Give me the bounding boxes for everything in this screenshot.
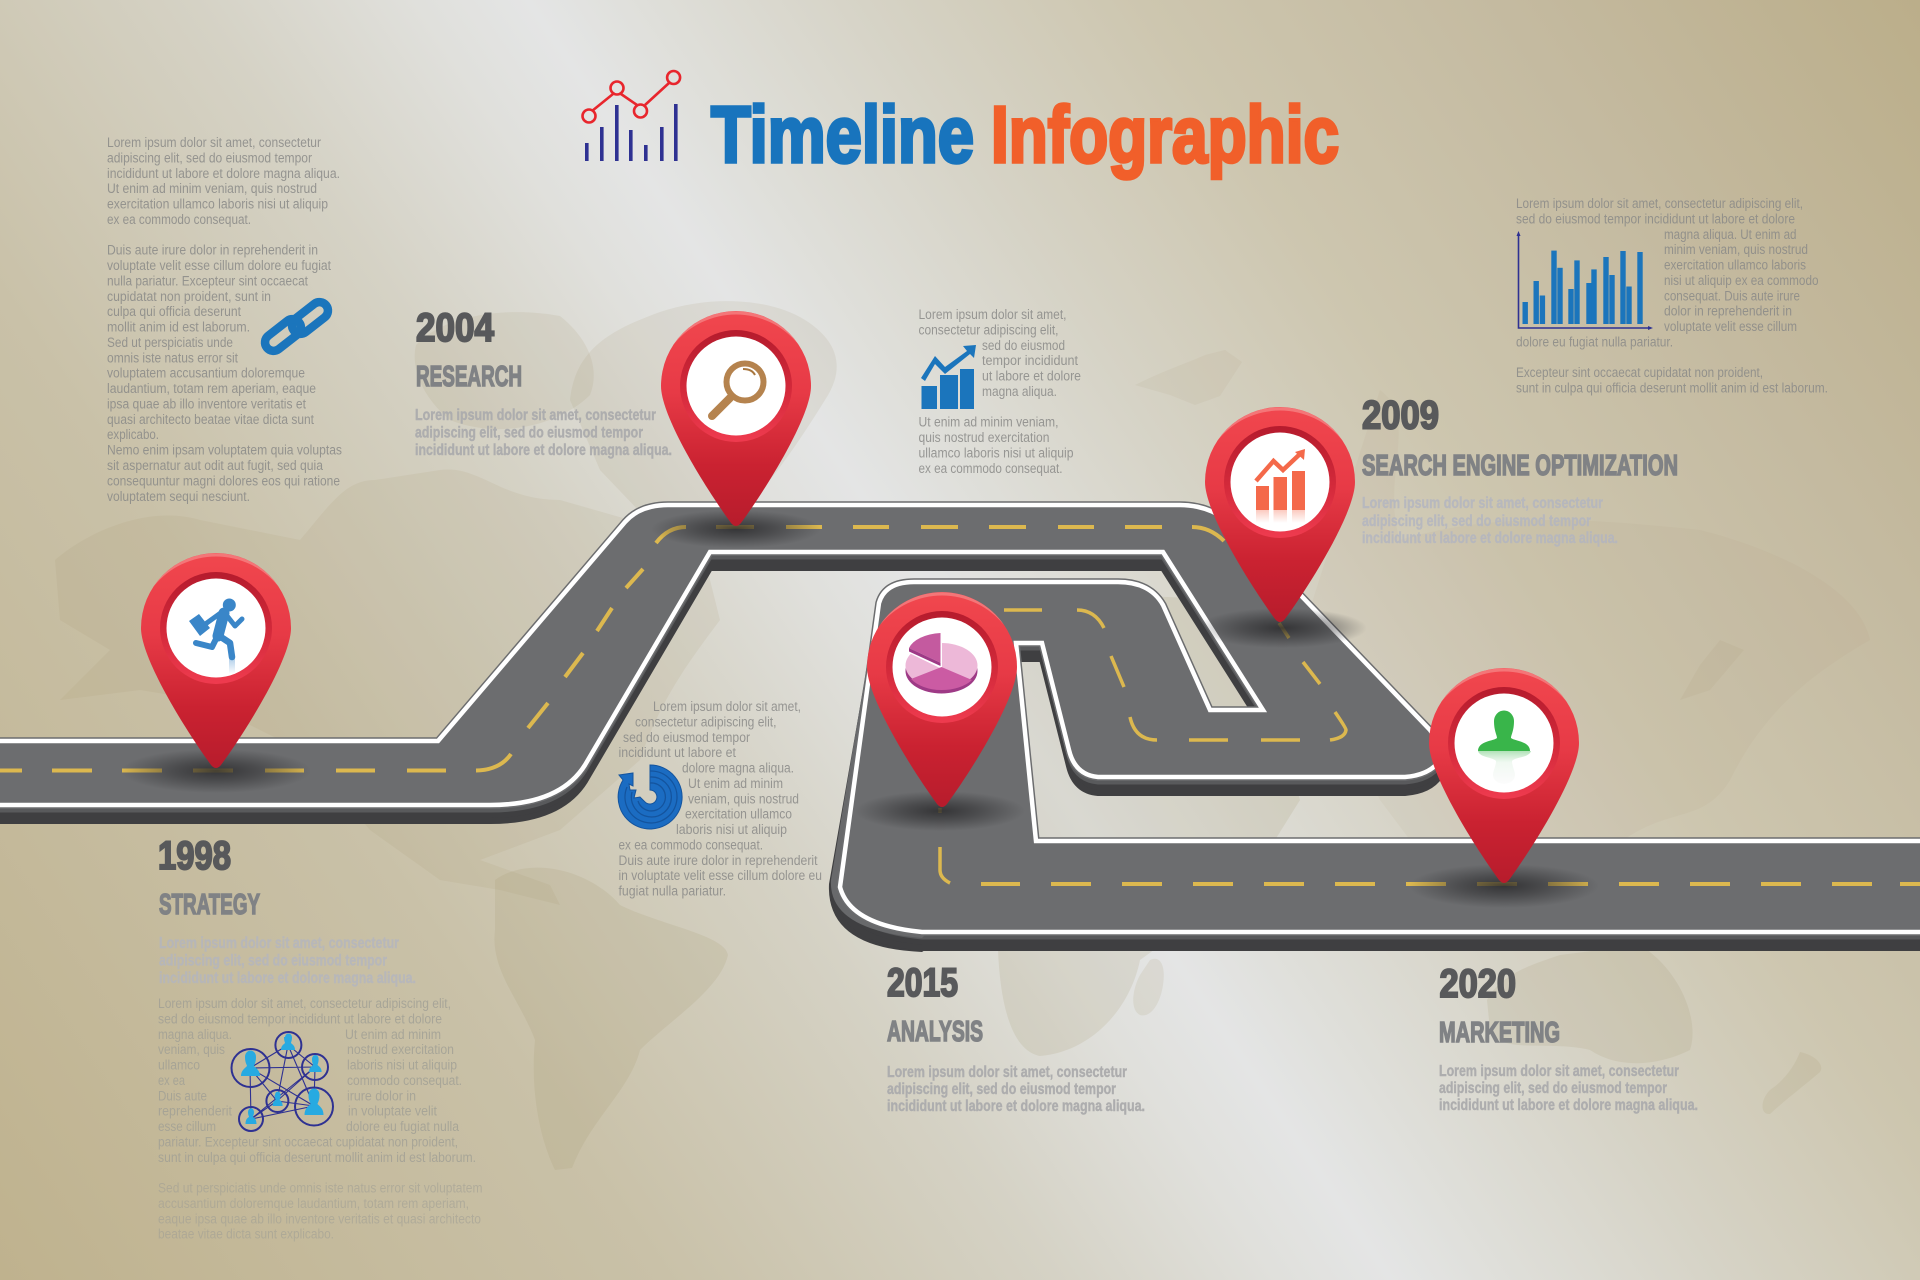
text block: top right with bar chart: sunt in culpa qui officia deserunt mollit anim id est laborum. bbox=[1516, 381, 1828, 396]
text block: bottom left with network icon: in voluptate velit bbox=[348, 1104, 437, 1119]
text block: top left bbox=[107, 135, 342, 504]
text block: middle with spiral icon: veniam, quis nostrud bbox=[688, 791, 799, 806]
text block: bottom left with network icon: commodo consequat. bbox=[347, 1073, 462, 1088]
text block: top middle with growth icon: ut labore et dolore bbox=[982, 368, 1081, 384]
text block: top right with bar chart bbox=[1516, 196, 1828, 396]
text block: top middle with growth icon: quis nostrud exercitation bbox=[918, 430, 1050, 445]
text block: top right with bar chart: nisi ut aliquip ex ea commodo bbox=[1664, 273, 1818, 288]
text block: top left: explicabo. bbox=[107, 427, 159, 442]
description 2004: Lorem ipsum dolor sit amet, consectetur bbox=[415, 407, 656, 424]
text block: bottom left with network icon: ullamco bbox=[158, 1058, 200, 1072]
milestone 2015 analysis bbox=[887, 961, 1145, 1115]
milestone 2009 search engine optimization bbox=[1362, 394, 1678, 547]
text block: top left: culpa qui officia deserunt bbox=[107, 304, 241, 319]
text block: top right with bar chart: voluptate velit esse cillum bbox=[1664, 319, 1797, 334]
description 1998 bbox=[159, 935, 416, 987]
heading marketing: MARKETING bbox=[1439, 1017, 1560, 1049]
text block: middle with spiral icon: fugiat nulla pariatur. bbox=[618, 884, 726, 899]
description 2009 bbox=[1362, 495, 1618, 547]
text block: top left: Sed ut perspiciatis unde bbox=[107, 335, 233, 350]
pin 2009 with growth chart icon bbox=[1205, 407, 1355, 622]
text block: bottom left with network icon: pariatur. Excepteur sint occaecat cupidatat non proident, bbox=[158, 1134, 458, 1149]
text block: top right with bar chart: magna aliqua. Ut enim ad bbox=[1664, 227, 1796, 242]
text block: top right with bar chart: consequat. Duis aute irure bbox=[1664, 288, 1800, 303]
text block: top left: voluptatem accusantium doloremque bbox=[107, 366, 305, 381]
text block: middle with spiral icon: consectetur adipiscing elit, bbox=[635, 714, 776, 729]
text block: middle with spiral icon: exercitation ullamco bbox=[685, 807, 792, 822]
text block: top middle with growth icon bbox=[918, 307, 1081, 476]
text block: bottom left with network icon: Sed ut perspiciatis unde omnis iste natus error sit voluptatem bbox=[158, 1181, 482, 1196]
text block: bottom left with network icon: Duis aute bbox=[158, 1088, 207, 1103]
description 2020: adipiscing elit, sed do eiusmod tempor bbox=[1439, 1080, 1667, 1097]
text block: middle with spiral icon: dolore magna aliqua. bbox=[682, 760, 794, 776]
heading strategy: STRATEGY bbox=[159, 889, 260, 921]
milestone 2020 marketing bbox=[1439, 962, 1698, 1114]
text block: bottom left with network icon: sunt in culpa qui officia deserunt mollit anim id est laborum. bbox=[158, 1150, 476, 1165]
text block: middle with spiral icon: ex ea commodo consequat. bbox=[618, 837, 763, 852]
heading research: RESEARCH bbox=[416, 361, 522, 393]
world map background bbox=[55, 301, 1870, 1170]
text block: top middle with growth icon: Lorem ipsum dolor sit amet, bbox=[918, 307, 1066, 322]
text block: top left: Nemo enim ipsam voluptatem quia voluptas bbox=[107, 443, 342, 458]
text block: top middle with growth icon: tempor incididunt bbox=[982, 353, 1078, 368]
icon: magnifier bbox=[712, 364, 764, 416]
text block: middle with spiral icon: Duis aute irure dolor in reprehenderit bbox=[618, 853, 818, 868]
description 2004: incididunt ut labore et dolore magna aliqua. bbox=[415, 442, 672, 459]
text block: top middle with growth icon: ex ea commodo consequat. bbox=[918, 461, 1062, 476]
text block: top left: omnis iste natus error sit bbox=[107, 350, 238, 365]
text block: top left: sit aspernatur aut odit aut fugit, sed quia bbox=[107, 458, 323, 473]
description 1998: incididunt ut labore et dolore magna aliqua. bbox=[159, 970, 416, 987]
icon: rising bars bbox=[1256, 449, 1305, 523]
text block: top middle with growth icon: ullamco laboris nisi ut aliquip bbox=[918, 445, 1074, 460]
text block: top left: cupidatat non proident, sunt in bbox=[107, 289, 271, 304]
text block: bottom left with network icon bbox=[158, 996, 482, 1242]
description 2004: adipiscing elit, sed do eiusmod tempor bbox=[415, 424, 643, 442]
text block: bottom left with network icon: veniam, quis bbox=[158, 1042, 225, 1057]
heading analysis: ANALYSIS bbox=[887, 1016, 983, 1048]
text block: top middle with growth icon: Ut enim ad minim veniam, bbox=[918, 415, 1058, 430]
year 2020: 2020 bbox=[1440, 962, 1516, 1006]
heading seo: SEARCH ENGINE OPTIMIZATION bbox=[1362, 450, 1678, 482]
milestone 2004 research bbox=[415, 306, 672, 459]
icon: title chart logo bbox=[582, 71, 680, 161]
text block: top left: voluptatem sequi nesciunt. bbox=[107, 489, 250, 504]
text block: middle with spiral icon: incididunt ut labore et bbox=[618, 745, 736, 760]
text block: top left: voluptate velit esse cillum dolore eu fugiat bbox=[107, 258, 331, 273]
bar chart bbox=[1516, 231, 1653, 330]
text block: top middle with growth icon: consectetur adipiscing elit, bbox=[918, 322, 1058, 337]
text block: top right with bar chart: dolore eu fugiat nulla pariatur. bbox=[1516, 334, 1673, 349]
road bbox=[0, 505, 1920, 952]
text block: bottom left with network icon: dolore eu fugiat nulla bbox=[346, 1119, 459, 1134]
year 1998: 1998 bbox=[158, 834, 231, 878]
icon: chain link bbox=[262, 299, 331, 354]
description 1998: adipiscing elit, sed do eiusmod tempor bbox=[159, 952, 387, 970]
icon: spiral chart bbox=[618, 765, 682, 829]
text block: top left: ex ea commodo consequat. bbox=[107, 212, 251, 227]
title text: Infographic bbox=[991, 90, 1339, 179]
description 2020: Lorem ipsum dolor sit amet, consectetur bbox=[1439, 1063, 1679, 1080]
text block: top right with bar chart: exercitation ullamco laboris bbox=[1664, 258, 1806, 272]
text block: top left: laudantium, totam rem aperiam, eaque bbox=[107, 381, 316, 396]
icon: people network bbox=[232, 1032, 333, 1131]
description 2009: incididunt ut labore et dolore magna aliqua. bbox=[1362, 530, 1618, 547]
text block: middle with spiral icon: laboris nisi ut aliquip bbox=[676, 822, 787, 837]
description 2015: incididunt ut labore et dolore magna aliqua. bbox=[887, 1098, 1145, 1115]
text block: bottom left with network icon: reprehenderit bbox=[158, 1104, 232, 1119]
text block: middle with spiral icon: Ut enim ad minim bbox=[688, 776, 783, 791]
text block: top middle with growth icon: sed do eiusmod bbox=[982, 338, 1065, 353]
text block: top right with bar chart: minim veniam, quis nostrud bbox=[1664, 242, 1808, 257]
text block: bottom left with network icon: nostrud exercitation bbox=[347, 1042, 454, 1057]
icon: pie chart bbox=[903, 633, 978, 694]
title bbox=[582, 71, 1339, 179]
text block: top left: nulla pariatur. Excepteur sint occaecat bbox=[107, 273, 308, 288]
pin shadows bbox=[121, 510, 1599, 908]
text block: top left: Duis aute irure dolor in reprehenderit in bbox=[107, 243, 318, 258]
description 2020: incididunt ut labore et dolore magna aliqua. bbox=[1439, 1097, 1698, 1114]
text block: bottom left with network icon: beatae vitae dicta sunt explicabo. bbox=[158, 1227, 334, 1242]
text block: top left: adipiscing elit, sed do eiusmod tempor bbox=[107, 150, 312, 165]
text block: top right with bar chart: sed do eiusmod tempor incididunt ut labore et dolore bbox=[1516, 211, 1795, 226]
text block: bottom left with network icon: laboris nisi ut aliquip bbox=[347, 1058, 457, 1072]
description 2009: adipiscing elit, sed do eiusmod tempor bbox=[1362, 513, 1591, 530]
description 2009: Lorem ipsum dolor sit amet, consectetur bbox=[1362, 495, 1603, 512]
text block: top right with bar chart: Lorem ipsum dolor sit amet, consectetur adipiscing elit, bbox=[1516, 196, 1803, 211]
text block: top left: Ut enim ad minim veniam, quis nostrud bbox=[107, 181, 317, 196]
text block: bottom left with network icon: esse cillum bbox=[158, 1119, 216, 1134]
text block: bottom left with network icon: accusantium doloremque laudantium, totam rem aperiam, bbox=[158, 1196, 469, 1211]
icon: person bbox=[1478, 711, 1531, 784]
description 2015 bbox=[887, 1064, 1145, 1115]
text block: top left: quasi architecto beatae vitae dicta sunt bbox=[107, 412, 314, 427]
description 2004 bbox=[415, 407, 672, 459]
text block: top left: mollit anim id est laborum. bbox=[107, 320, 250, 335]
road centre line bbox=[0, 527, 1920, 884]
text block: bottom left with network icon: ex ea bbox=[158, 1073, 185, 1088]
text block: top left: ipsa quae ab illo inventore veritatis et bbox=[107, 396, 306, 412]
text block: top left: incididunt ut labore et dolore magna aliqua. bbox=[107, 166, 340, 181]
text block: top middle with growth icon: magna aliqua. bbox=[982, 384, 1057, 399]
text block: bottom left with network icon: Lorem ipsum dolor sit amet, consectetur adipiscing elit, bbox=[158, 996, 451, 1011]
description 2020 bbox=[1439, 1063, 1698, 1114]
text block: top right with bar chart: Excepteur sint occaecat cupidatat non proident, bbox=[1516, 365, 1763, 380]
text block: bottom left with network icon: eaque ipsa quae ab illo inventore veritatis et quasi architecto bbox=[158, 1211, 481, 1226]
icon: runner bbox=[189, 598, 242, 674]
year 2015: 2015 bbox=[887, 961, 958, 1005]
description 2015: Lorem ipsum dolor sit amet, consectetur bbox=[887, 1064, 1127, 1081]
text block: top left: Lorem ipsum dolor sit amet, consectetur bbox=[107, 135, 321, 150]
year 2004: 2004 bbox=[416, 306, 495, 350]
pin 2020 with person icon bbox=[1429, 668, 1579, 883]
text block: bottom left with network icon: irure dolor in bbox=[347, 1088, 416, 1103]
text block: middle with spiral icon bbox=[618, 699, 822, 899]
description 1998: Lorem ipsum dolor sit amet, consectetur bbox=[159, 935, 399, 952]
text block: middle with spiral icon: sed do eiusmod tempor bbox=[623, 730, 750, 745]
text block: top right with bar chart: dolor in reprehenderit in bbox=[1664, 304, 1792, 319]
pin 2015 with pie chart icon bbox=[867, 592, 1017, 807]
pin 1998 with runner icon bbox=[141, 553, 291, 768]
text block: middle with spiral icon: Lorem ipsum dolor sit amet, bbox=[653, 699, 801, 714]
pin 2004 with magnifier icon bbox=[661, 311, 811, 526]
year 2009: 2009 bbox=[1362, 394, 1439, 438]
description 2015: adipiscing elit, sed do eiusmod tempor bbox=[887, 1081, 1116, 1098]
text block: bottom left with network icon: Ut enim ad minim bbox=[345, 1027, 441, 1042]
text block: top left: consequuntur magni dolores eos qui ratione bbox=[107, 473, 340, 488]
text block: top left: exercitation ullamco laboris nisi ut aliquip bbox=[107, 196, 328, 212]
icon: growth chart bbox=[921, 345, 976, 409]
text block: bottom left with network icon: magna aliqua. bbox=[158, 1027, 232, 1042]
text block: middle with spiral icon: in voluptate velit esse cillum dolore eu bbox=[618, 868, 822, 883]
milestone 1998 strategy bbox=[158, 834, 416, 987]
text block: bottom left with network icon: sed do eiusmod tempor incididunt ut labore et dolore bbox=[158, 1011, 442, 1026]
title text: Timeline bbox=[711, 90, 974, 179]
